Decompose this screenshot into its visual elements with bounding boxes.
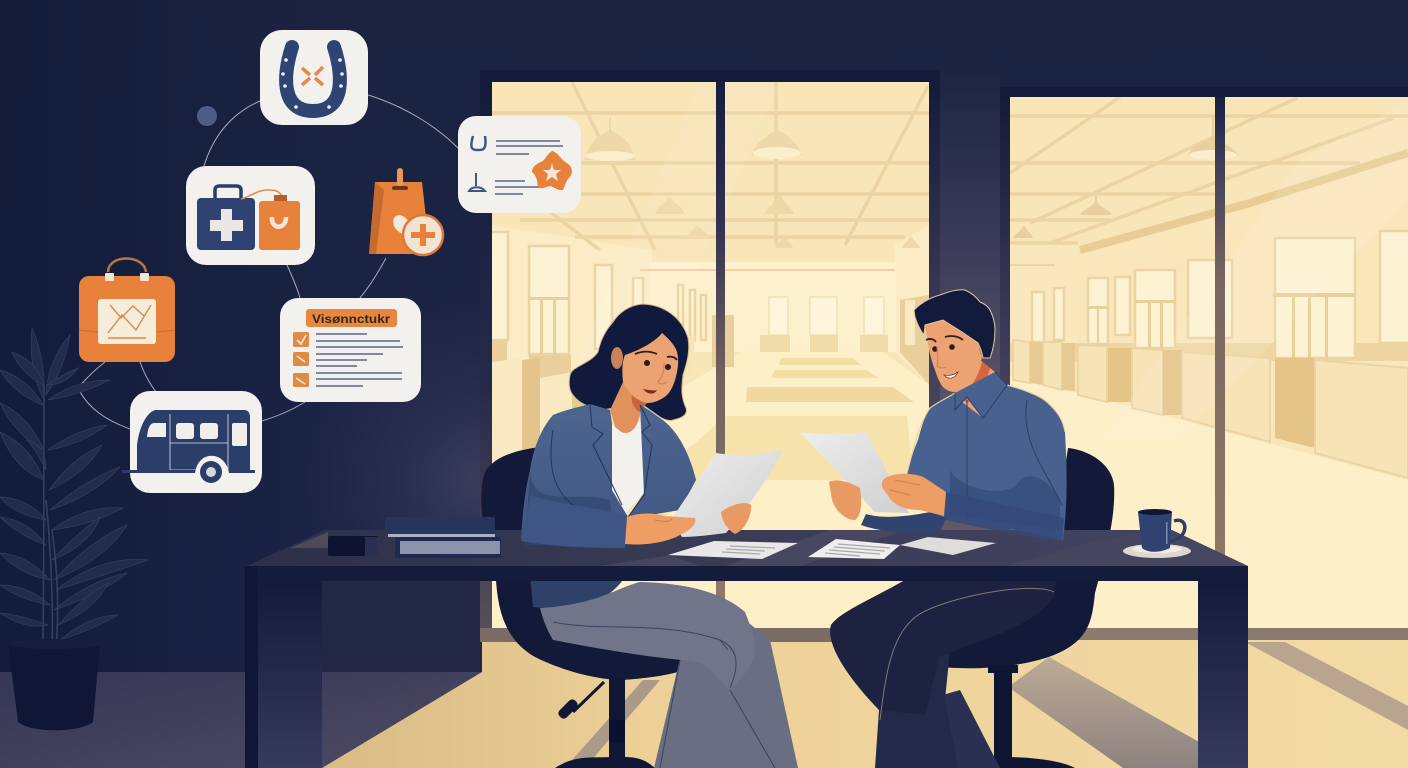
light shafts (560, 82, 780, 400)
man chair (939, 448, 1114, 768)
pendant lamps (585, 118, 920, 248)
tan band behind partitions (1010, 343, 1408, 361)
office end wall (650, 262, 896, 352)
icon: bus (122, 410, 255, 483)
floor (1010, 375, 1408, 630)
window 2 interior (1010, 97, 1408, 630)
jacket lower (530, 575, 624, 608)
office left partitions (492, 297, 734, 450)
woman chair (481, 447, 684, 768)
white top (612, 415, 644, 514)
front lower leg (831, 640, 958, 768)
icon: shopping tag with plus (369, 168, 443, 255)
held paper (671, 450, 783, 537)
face (925, 320, 982, 392)
icon: horseshoe (286, 47, 340, 111)
books and box (328, 517, 501, 558)
man legs (830, 580, 1056, 768)
checkboxes (293, 332, 309, 387)
sleeve seam (1026, 400, 1062, 505)
wall windows (1032, 231, 1408, 358)
plant (0, 328, 148, 730)
office right wall (895, 225, 929, 385)
collar (955, 372, 1007, 418)
neck shadow (960, 362, 990, 403)
hair back (569, 304, 689, 420)
table edge (247, 566, 1248, 581)
light shafts (1128, 114, 1408, 422)
hands (829, 480, 861, 520)
icon: orange bag (241, 190, 300, 250)
coffee mug (1123, 509, 1191, 558)
rear lower leg (925, 690, 1000, 768)
lapels and seams (551, 404, 652, 520)
hair (914, 290, 995, 358)
facial features (926, 336, 963, 342)
end wall section (1010, 243, 1080, 353)
right wall (1078, 155, 1408, 480)
documents on table (668, 537, 996, 559)
rear leg (654, 600, 798, 768)
window 1 interior (488, 82, 930, 640)
window frames (480, 60, 1408, 642)
partitions and cabinets (1013, 340, 1408, 478)
icon: orange briefcase with chart (79, 258, 175, 362)
ceiling beams (492, 82, 929, 270)
ceiling beams (1010, 97, 1408, 265)
office end wall windows (769, 297, 884, 335)
woman legs (530, 575, 798, 768)
man (800, 290, 1067, 541)
card: features (458, 116, 581, 213)
far forearm (861, 512, 946, 533)
hands (721, 503, 751, 534)
plant stems (43, 385, 58, 648)
dot accent (197, 106, 217, 126)
neck shadow (632, 395, 647, 412)
card: horseshoe (260, 30, 368, 125)
thigh (540, 582, 755, 690)
face (622, 333, 678, 403)
shirt (907, 372, 1067, 540)
office left wall windows (488, 232, 706, 354)
near sleeve (521, 495, 627, 548)
icon: anchor shape (469, 173, 485, 191)
shirt shadow (950, 470, 1060, 530)
cuff near (944, 492, 1064, 541)
woman (521, 304, 783, 548)
office floor (492, 350, 929, 630)
card: medical kit (186, 166, 315, 265)
plant fronds (0, 328, 148, 640)
banner text: Visønnctukr (312, 312, 390, 326)
shoulder halo (907, 385, 1065, 473)
icon: orange star badge (532, 151, 572, 190)
thigh and knee (830, 580, 1056, 715)
neck (955, 360, 1007, 418)
card: camper bus (122, 391, 262, 493)
connector lines (78, 95, 458, 429)
icon: navy first aid bag (197, 186, 255, 250)
facial features (635, 352, 677, 360)
office right cabinets (900, 295, 929, 385)
text lines (495, 141, 563, 194)
plant pot (8, 640, 100, 730)
text lines (316, 334, 403, 386)
card: checklist (280, 298, 421, 402)
neck (610, 382, 640, 437)
office left wall (492, 225, 652, 372)
icon: small horseshoe (471, 136, 486, 150)
table surface reflections (725, 530, 905, 566)
floor (0, 581, 1408, 768)
table (245, 530, 1248, 768)
table top (247, 530, 1248, 566)
thick ceiling beam (1080, 153, 1408, 250)
table legs (245, 581, 322, 768)
office floor patches (626, 358, 914, 516)
pendant lamps (1013, 116, 1238, 238)
label banner (306, 309, 397, 327)
partition mullions (1088, 293, 1355, 358)
held paper (800, 432, 909, 513)
jacket (521, 404, 696, 548)
